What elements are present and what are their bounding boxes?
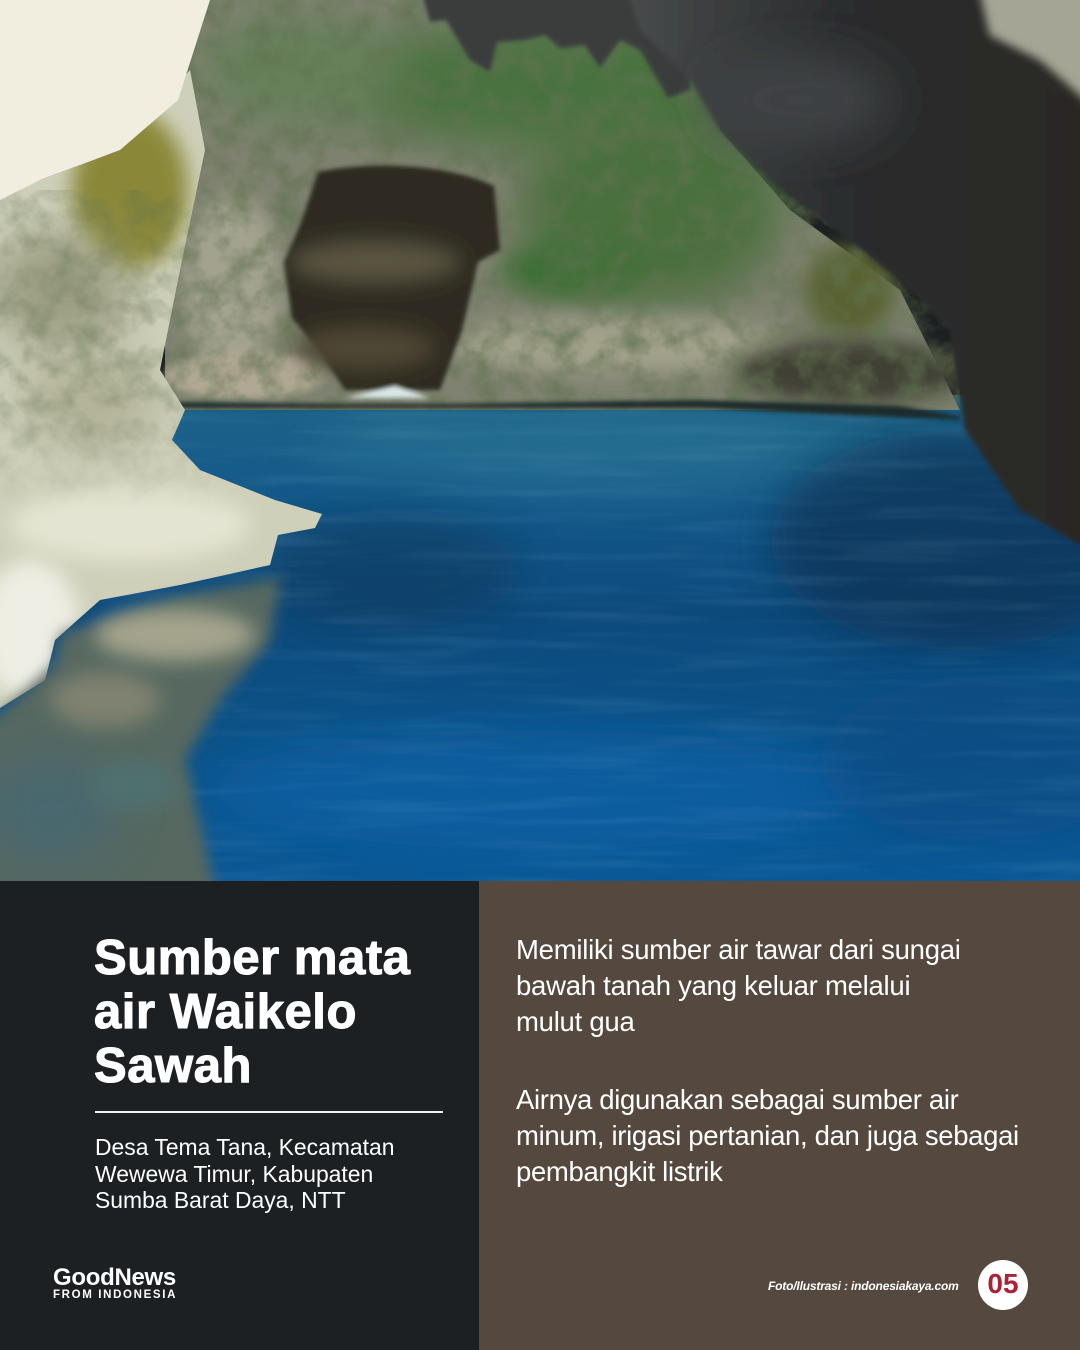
paragraph: water source: mulut gua <box>516 1006 635 1037</box>
location text: Wewewa Timur, Kabupaten <box>95 1160 373 1186</box>
photo credit: Foto/Ilustrasi : indonesiakaya.com <box>768 1279 959 1293</box>
paragraph: water source: Memiliki sumber air tawar dari sungai <box>516 934 961 965</box>
heading: Sumber mata <box>94 931 410 985</box>
page number badge <box>978 1260 1028 1310</box>
right dark cave wall <box>620 0 1080 575</box>
paragraph: water uses: minum, irigasi pertanian, dan juga sebagai <box>516 1120 1019 1151</box>
paragraph: water source: bawah tanah yang keluar melalui <box>516 970 910 1001</box>
water <box>0 395 1080 881</box>
paragraph: water uses: pembangkit listrik <box>516 1156 723 1187</box>
divider line <box>95 1111 443 1113</box>
left pale rocks <box>0 0 330 720</box>
photo: cave lake <box>0 0 1080 881</box>
paragraph: water uses: Airnya digunakan sebagai sumber air <box>516 1084 958 1115</box>
logo: GoodNews from Indonesia: GoodNews <box>53 1264 176 1291</box>
paragraph: water uses <box>516 1084 1019 1187</box>
location text: Desa Tema Tana, Kecamatan <box>95 1134 394 1160</box>
back wall with moss <box>165 0 965 420</box>
paragraph: water source <box>516 934 961 1037</box>
heading: Sawah <box>94 1039 252 1093</box>
page number badge: 05 <box>987 1268 1019 1299</box>
location text: Sumba Barat Daya, NTT <box>95 1187 346 1213</box>
panel: title panel <box>0 881 479 1350</box>
location text <box>95 1134 394 1213</box>
inner cave mouth <box>284 166 500 398</box>
heading: air Waikelo <box>94 985 357 1039</box>
stalactites <box>415 0 700 98</box>
panel: description panel <box>479 881 1080 1350</box>
logo: GoodNews from Indonesia: FROM INDONESIA <box>53 1289 177 1301</box>
reflection of rocks <box>0 578 280 910</box>
heading <box>94 931 411 1093</box>
